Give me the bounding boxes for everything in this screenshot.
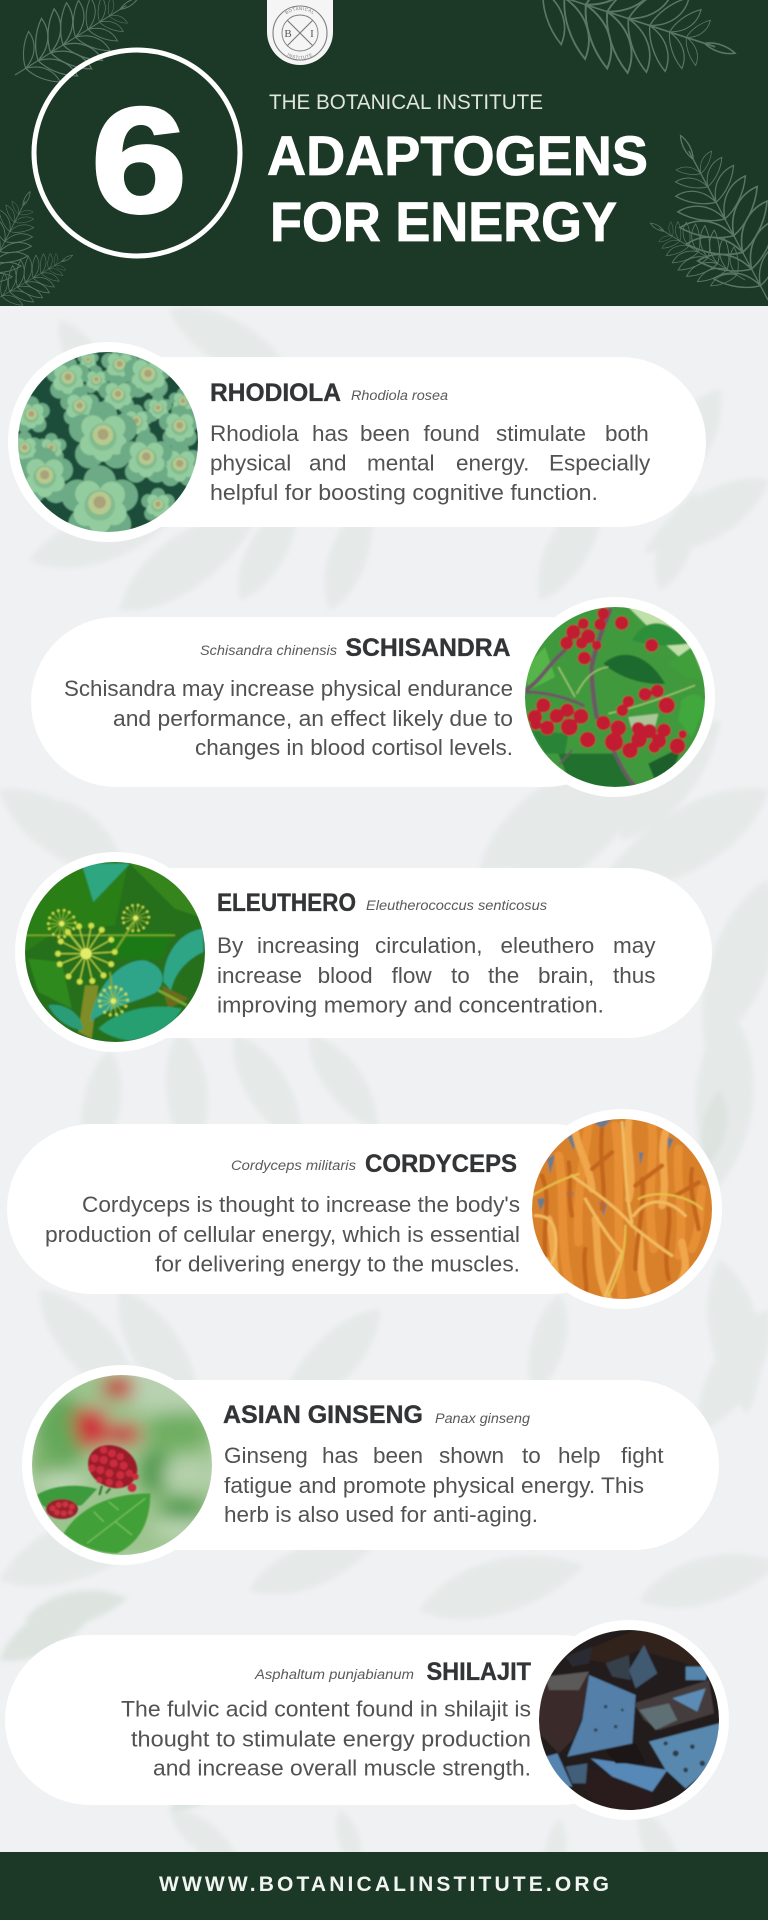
heading: shilajit: SHILAJIT	[426, 1658, 531, 1686]
logo badge: I	[310, 28, 314, 40]
organisation name: THE BOTANICAL INSTITUTE	[269, 91, 543, 114]
panel: rhodiola	[8, 342, 706, 542]
text: ginseng description: been	[373, 1443, 429, 1468]
heading: schisandra	[200, 634, 510, 662]
title: FOR ENERGY	[270, 190, 617, 253]
photo: ginseng berries	[32, 1375, 212, 1555]
heading: eleuthero: ELEUTHERO	[217, 889, 356, 917]
panel: schisandra	[31, 597, 715, 797]
ring with number 6: 6	[91, 76, 187, 244]
text: schisandra description: and performance, an effect likely due to	[113, 706, 513, 731]
leaf fronds in header	[0, 0, 768, 321]
text: rhodiola description: stimulate	[496, 421, 592, 446]
text: rhodiola description: Rhodiola	[210, 421, 305, 446]
heading: cordyceps	[231, 1150, 517, 1178]
text: ginseng description: to	[522, 1443, 547, 1468]
title	[267, 124, 648, 253]
text: eleuthero description: improving memory and concentration.	[217, 992, 604, 1018]
text: ginseng description: fight	[621, 1443, 664, 1468]
text: ginseng description: Ginseng	[224, 1443, 314, 1468]
text: schisandra description: changes in blood cortisol levels.	[195, 735, 513, 760]
text: rhodiola description: been	[360, 421, 416, 446]
text: eleuthero description	[217, 933, 656, 1018]
text: eleuthero description: to	[451, 963, 476, 988]
heading: rhodiola	[210, 379, 449, 407]
footer band with website: WWWW.BOTANICALINSTITUTE.ORG	[159, 1873, 609, 1896]
text: eleuthero description: brain,	[538, 963, 601, 988]
text: eleuthero description: may	[613, 933, 656, 958]
text: shilajit description: thought to stimulate energy production	[131, 1726, 531, 1752]
text: eleuthero description: blood	[318, 963, 379, 988]
text: shilajit description: The fulvic acid content found in shilajit is	[121, 1696, 531, 1722]
panel: asian ginseng	[22, 1365, 719, 1565]
ring with number 6	[34, 50, 240, 256]
logo badge: B	[284, 28, 292, 40]
photo: cordyceps strands	[532, 1119, 712, 1299]
logo badge: BOTANICAL	[285, 7, 314, 14]
text: rhodiola description: energy.	[456, 450, 536, 476]
heading: asian ginseng: ASIAN GINSENG	[223, 1401, 423, 1429]
photo: schisandra berries	[525, 607, 705, 787]
text: ginseng description: help	[558, 1443, 607, 1468]
text: rhodiola description: found	[424, 421, 486, 446]
text: rhodiola description: mental	[367, 450, 441, 476]
photo: shilajit rocks	[539, 1630, 719, 1810]
text: shilajit description: and increase overall muscle strength.	[153, 1756, 531, 1780]
heading: eleuthero	[217, 889, 547, 917]
heading: shilajit	[254, 1658, 531, 1686]
text: ginseng description: herb is also used for anti-aging.	[224, 1502, 538, 1527]
heading: shilajit: Asphaltum punjabianum	[254, 1667, 414, 1682]
text: cordyceps description	[45, 1192, 520, 1276]
heading: eleuthero: Eleutherococcus senticosus	[366, 898, 547, 913]
logo badge: INSTITUTE	[287, 53, 312, 59]
text: schisandra description: Schisandra may increase physical endurance	[64, 676, 513, 701]
text: rhodiola description: Especially	[549, 450, 651, 476]
logo badge	[267, 0, 333, 65]
text: ginseng description: has	[322, 1443, 365, 1468]
header band	[0, 0, 768, 306]
heading: schisandra: SCHISANDRA	[346, 634, 510, 662]
text: ginseng description	[224, 1443, 664, 1527]
text: ginseng description: shown	[439, 1443, 510, 1468]
text: cordyceps description: for delivering energy to the muscles.	[155, 1252, 520, 1276]
footer band with website	[0, 1852, 768, 1920]
text: cordyceps description: production of cellular energy, which is essential	[45, 1222, 520, 1247]
text: eleuthero description: the	[488, 963, 526, 988]
heading: cordyceps: CORDYCEPS	[365, 1150, 517, 1178]
heading: asian ginseng: Panax ginseng	[435, 1411, 531, 1426]
text: rhodiola description: both	[605, 421, 649, 446]
text: eleuthero description: eleuthero	[500, 933, 601, 958]
title: ADAPTOGENS	[267, 124, 648, 187]
heading: cordyceps: Cordyceps militaris	[231, 1158, 356, 1173]
panel: shilajit	[5, 1620, 729, 1820]
photo: rhodiola plants	[18, 352, 198, 532]
text: rhodiola description: physical	[210, 450, 298, 476]
text: rhodiola description: helpful for boosting cognitive function.	[210, 480, 598, 505]
text: eleuthero description: thus	[613, 963, 656, 988]
text: shilajit description	[121, 1696, 531, 1780]
text: schisandra description	[64, 676, 513, 760]
heading: asian ginseng	[223, 1401, 531, 1429]
text: eleuthero description: increasing	[257, 933, 366, 958]
text: eleuthero description: circulation,	[375, 933, 489, 958]
text: cordyceps description: Cordyceps is thought to increase the body's	[82, 1192, 520, 1217]
text: eleuthero description: increase	[217, 963, 308, 988]
photo: eleuthero flower	[25, 862, 205, 1042]
panel: eleuthero	[15, 852, 712, 1052]
heading: rhodiola: RHODIOLA	[210, 379, 341, 407]
text: rhodiola description	[210, 421, 651, 505]
text: eleuthero description: flow	[392, 963, 438, 988]
heading: schisandra: Schisandra chinensis	[200, 643, 337, 658]
text: rhodiola description: and	[309, 450, 353, 476]
text: rhodiola description: has	[312, 421, 355, 446]
text: eleuthero description: By	[217, 933, 250, 958]
heading: rhodiola: Rhodiola rosea	[351, 388, 449, 403]
text: ginseng description: fatigue and promote physical energy. This	[224, 1473, 644, 1498]
panel: cordyceps	[7, 1109, 722, 1309]
